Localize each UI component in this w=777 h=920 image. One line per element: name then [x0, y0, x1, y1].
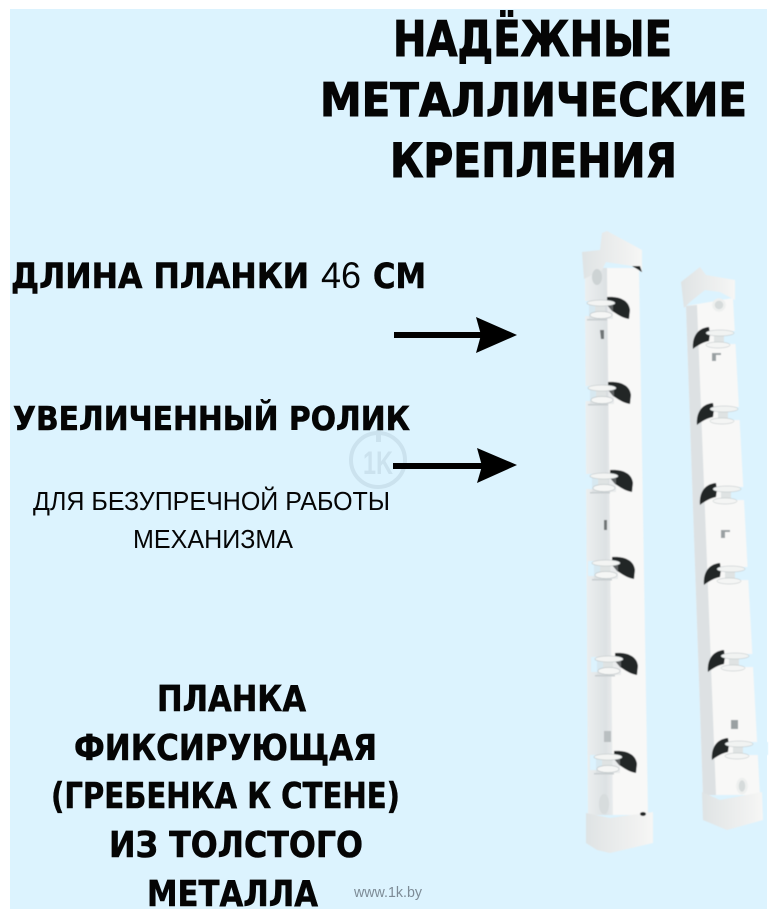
text block: fixing plank description: МЕТАЛЛА — [147, 874, 318, 915]
label: plank length: ДЛИНА ПЛАНКИ — [11, 257, 309, 297]
title: МЕТАЛЛИЧЕСКИЕ — [320, 73, 747, 127]
label: plank length: 46 — [321, 255, 361, 296]
label: plank length: СМ — [373, 257, 426, 297]
text block: roller purpose: ДЛЯ БЕЗУПРЕЧНОЙ РАБОТЫ — [33, 486, 390, 516]
label: enlarged roller: УВЕЛИЧЕННЫЙ РОЛИК — [13, 398, 410, 438]
title — [320, 10, 747, 189]
text block: fixing plank description — [51, 679, 400, 915]
text block: fixing plank description: ФИКСИРУЮЩАЯ — [74, 728, 377, 769]
text block: fixing plank description: (ГРЕБЕНКА К СТЕНЕ) — [51, 776, 400, 817]
watermark: site address: www.1k.by — [353, 885, 423, 901]
watermark: 1K logo: 1K — [363, 445, 393, 481]
text block: fixing plank description: ИЗ ТОЛСТОГО — [109, 825, 363, 866]
arrow: plank length — [394, 317, 517, 353]
text block: fixing plank description: ПЛАНКА — [157, 679, 306, 720]
text block: roller purpose — [33, 486, 390, 554]
text block: roller purpose: МЕХАНИЗМА — [133, 524, 294, 554]
title: КРЕПЛЕНИЯ — [390, 134, 677, 189]
title: НАДЁЖНЫЕ — [393, 10, 672, 68]
photo: right fixing plank — [681, 267, 768, 830]
watermark: 1K logo — [351, 430, 405, 487]
arrow: enlarged roller — [393, 448, 517, 483]
photo: left fixing plank — [582, 231, 653, 853]
